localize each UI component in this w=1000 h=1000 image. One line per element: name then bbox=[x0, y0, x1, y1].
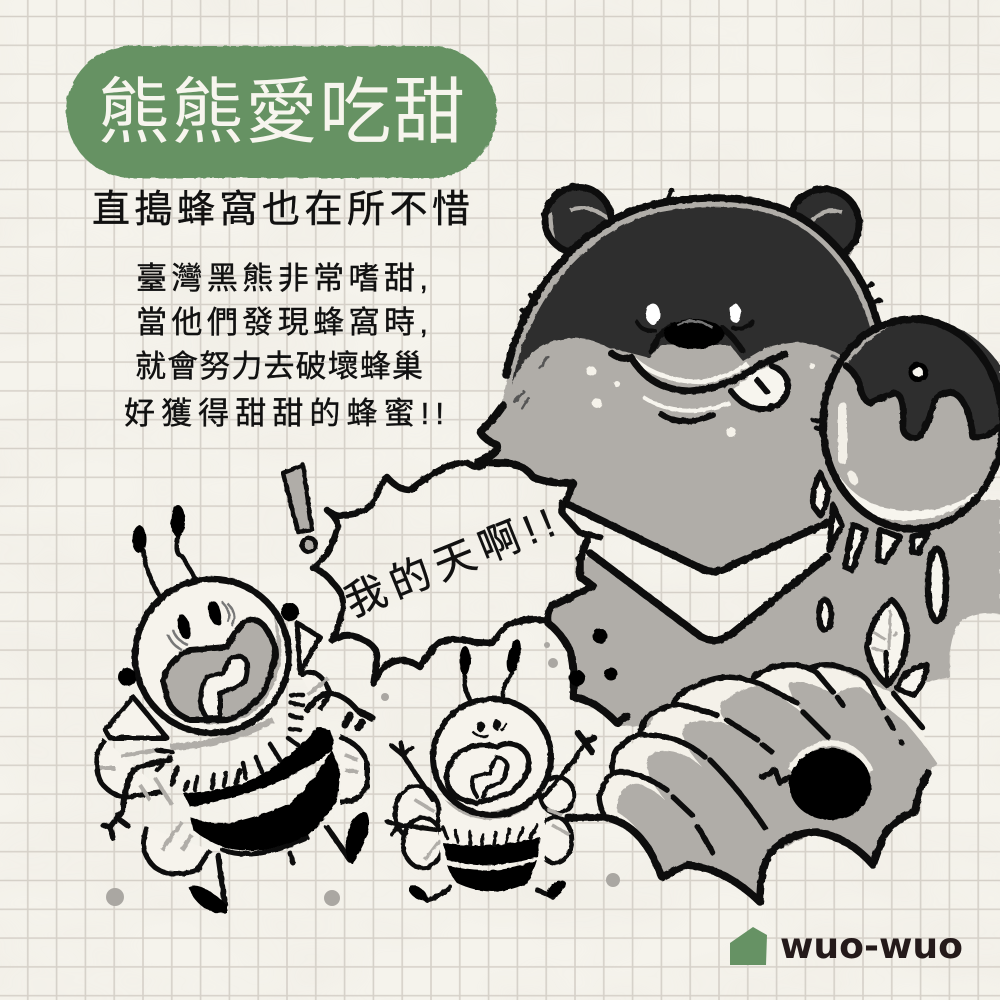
body text: 當他們發現蜂窩時, bbox=[136, 305, 428, 340]
hive outline bbox=[568, 773, 928, 902]
speech bubble text: 我的天啊!! bbox=[338, 500, 561, 625]
crescent highlight bbox=[828, 450, 990, 520]
honey ball held by paw bbox=[823, 318, 1000, 529]
body upper stripe bbox=[183, 727, 334, 807]
cheek marks bbox=[515, 356, 842, 408]
hive shell bbox=[600, 665, 937, 902]
logo wordmark: wuo-wuo bbox=[780, 926, 963, 967]
eyes bbox=[175, 599, 224, 641]
title pill bbox=[66, 46, 497, 178]
leaf big bbox=[867, 600, 907, 685]
big bee legs bbox=[218, 827, 350, 905]
ball outline bbox=[823, 319, 1000, 529]
left ear bbox=[545, 187, 611, 255]
big bee wings bbox=[96, 672, 367, 874]
fur ticks bbox=[522, 190, 880, 430]
wing tip right bbox=[297, 623, 320, 673]
chin and cheek outline bbox=[478, 405, 827, 572]
shadow under head bbox=[170, 720, 273, 747]
arms and legs bbox=[388, 742, 585, 900]
speech bubble outline bbox=[313, 463, 600, 683]
title text: 熊熊愛吃甜 bbox=[98, 73, 465, 153]
head side dots bbox=[118, 603, 299, 686]
bear head bbox=[478, 198, 880, 572]
body spots bbox=[569, 628, 618, 686]
hive ribs bbox=[599, 665, 922, 853]
lower stripe bbox=[447, 860, 537, 892]
right ear bbox=[789, 189, 859, 262]
eyes bbox=[637, 304, 753, 331]
fuzz hashes bbox=[157, 695, 303, 790]
stripes bbox=[443, 837, 540, 865]
tongue bbox=[731, 366, 788, 409]
wing shading bbox=[100, 678, 358, 850]
cap outline bbox=[846, 366, 1000, 438]
honey drop small bbox=[819, 600, 831, 630]
head outline bbox=[506, 198, 879, 375]
honey drop large bbox=[928, 549, 946, 621]
screaming mouth bbox=[163, 620, 275, 720]
logo house icon bbox=[730, 927, 767, 965]
beehive bbox=[568, 665, 937, 902]
body text: 臺灣黑熊非常嗜甜, bbox=[136, 261, 428, 296]
stripe highlight bbox=[838, 402, 847, 464]
fuzz bbox=[443, 825, 537, 845]
head outline bbox=[433, 699, 551, 815]
freckles bbox=[586, 363, 815, 437]
small bee bbox=[388, 638, 594, 904]
head shading bbox=[165, 610, 281, 724]
body underline bbox=[223, 838, 307, 863]
body text bbox=[124, 261, 444, 431]
hand of big bee bbox=[345, 712, 372, 728]
nose bbox=[652, 319, 742, 352]
bear body outlines bbox=[548, 540, 827, 723]
hive grey shading bbox=[617, 682, 937, 902]
bear bbox=[478, 187, 1000, 730]
subtitle: 直搗蜂窩也在所不惜 bbox=[92, 189, 470, 231]
wing shading bbox=[415, 800, 570, 860]
logo bbox=[730, 926, 963, 967]
bear lower body bbox=[548, 500, 1000, 730]
antennae bbox=[132, 505, 198, 600]
feet bbox=[406, 878, 568, 904]
torso bbox=[440, 810, 545, 860]
head shading bbox=[445, 795, 540, 820]
antennae bbox=[460, 638, 523, 700]
small highlight bbox=[846, 469, 860, 487]
hole in cap bbox=[908, 362, 928, 382]
head outline bbox=[135, 579, 289, 733]
grey paint dots bbox=[106, 642, 620, 906]
head bbox=[135, 579, 289, 733]
wing tip left bbox=[105, 697, 167, 738]
hive hole rim bbox=[790, 743, 871, 772]
eyes bbox=[477, 720, 501, 732]
body text: 好獲得甜甜的蜂蜜!! bbox=[124, 396, 444, 431]
leaf small bbox=[897, 665, 927, 695]
feet bbox=[188, 812, 369, 913]
hole centre bbox=[913, 367, 923, 377]
tongue bbox=[200, 657, 247, 718]
mouth bbox=[611, 353, 785, 391]
claws under the paw bbox=[813, 473, 928, 570]
hand right bbox=[578, 733, 594, 752]
big bee arms bbox=[103, 693, 370, 838]
cheek lines bbox=[473, 724, 506, 736]
big bee bbox=[96, 505, 372, 913]
tongue bbox=[472, 757, 507, 797]
mouth bbox=[447, 744, 529, 803]
small bee wings bbox=[395, 777, 574, 868]
exclamation mark bbox=[283, 465, 316, 552]
hive hole bbox=[789, 748, 871, 820]
dark fur of head bbox=[512, 207, 874, 385]
body text: 就會努力去破壞蜂巢 bbox=[135, 349, 423, 384]
chocolate cap bbox=[846, 318, 1000, 438]
lashes bbox=[168, 602, 234, 650]
head bbox=[433, 699, 551, 815]
body lower stripe bbox=[190, 750, 340, 851]
chin crease bbox=[643, 397, 730, 421]
